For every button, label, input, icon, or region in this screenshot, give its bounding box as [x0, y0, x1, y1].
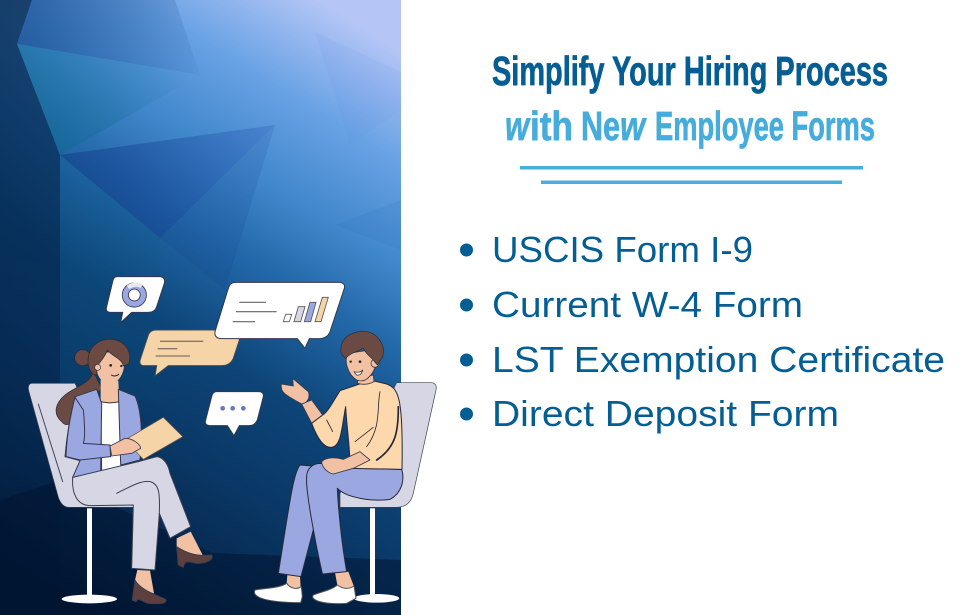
chair: man's chair — [340, 383, 436, 603]
list item: Direct Deposit Form: Direct Deposit Form — [492, 393, 839, 434]
legs: woman's trousers and heels — [73, 457, 212, 604]
hair: woman's bun and ponytail — [56, 350, 102, 425]
list: required employee forms — [460, 229, 945, 434]
tablet: woman's clipboard — [125, 417, 183, 459]
icon: donut ring — [125, 285, 143, 304]
title: second line: ith — [530, 103, 573, 149]
hand: woman's hand — [110, 438, 141, 456]
illustration: woman seated on chair — [28, 339, 212, 604]
list item: Current W-4 Form: Current W-4 Form — [492, 284, 803, 325]
legs: man's trousers and shoes — [254, 463, 403, 604]
illustration: man seated on chair — [254, 331, 436, 604]
chart: rising bars — [283, 297, 328, 322]
title: second line: w — [620, 103, 647, 149]
head: woman's face and hair — [88, 339, 130, 384]
speech bubble: bar chart — [215, 282, 345, 348]
title: second line: Ne — [581, 103, 620, 149]
chair: woman's chair — [28, 383, 133, 603]
list item: USCIS Form I-9: USCIS Form I-9 — [492, 229, 753, 270]
head: man's face and hair — [341, 331, 383, 384]
title: second line: Employee Forms — [655, 103, 875, 149]
title: second line — [505, 103, 875, 149]
divider: double underline — [520, 166, 863, 184]
body: woman's jacket and shirt — [65, 380, 141, 477]
hand: man's raised hand — [281, 378, 323, 423]
body: man's sweater — [312, 380, 402, 469]
list item: LST Exemption Certificate: LST Exemption Certificate — [492, 339, 945, 380]
speech bubble: donut chart — [106, 277, 165, 323]
speech bubble: peach notes — [140, 330, 240, 376]
hand: man's hand on knee — [322, 452, 370, 474]
panel: polygon blue background — [0, 0, 401, 615]
speech bubble: three dots — [205, 392, 263, 436]
title: second line: w — [505, 103, 531, 149]
